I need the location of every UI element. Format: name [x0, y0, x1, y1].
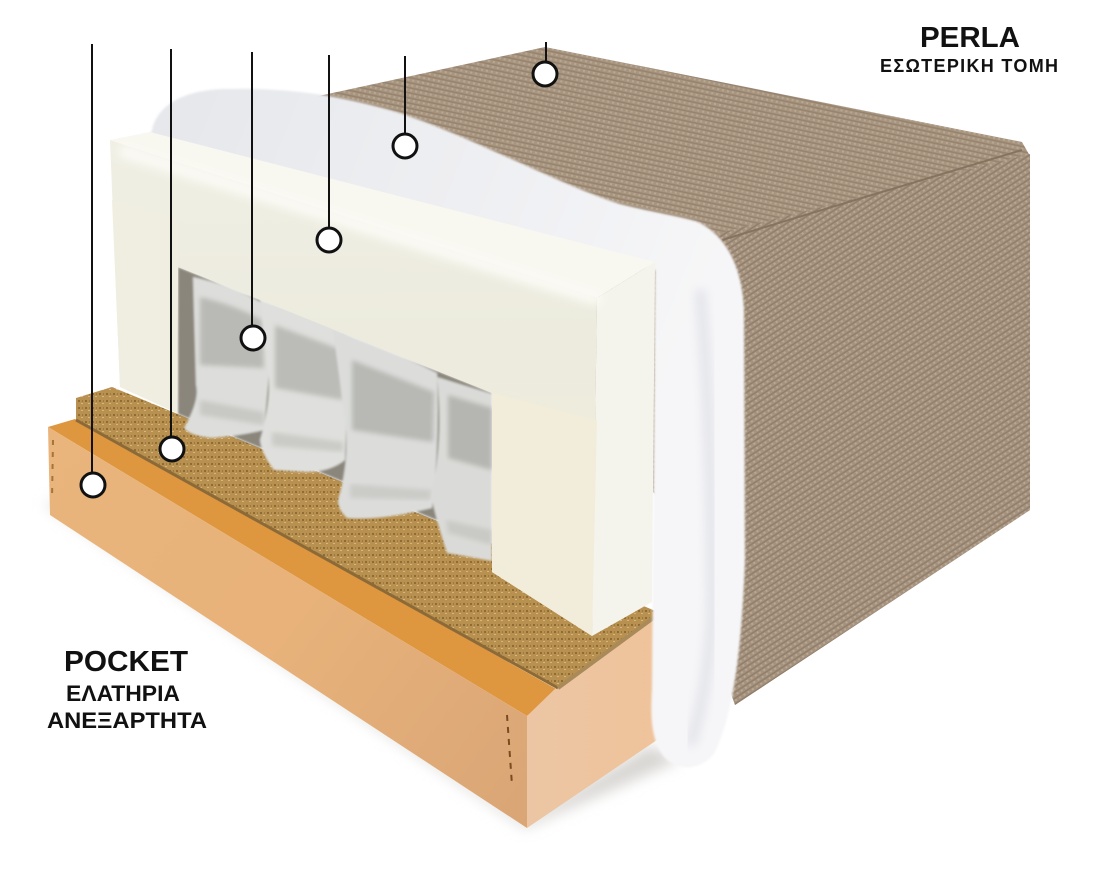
title: PERLA: ΕΣΩΤΕΡΙΚΗ ΤΟΜΗ: [880, 56, 1058, 76]
chipboard layer: [76, 387, 658, 688]
ground shadow: [46, 500, 680, 828]
title: PERLA: PERLA: [920, 22, 1020, 54]
marker 4: foam: [317, 55, 341, 252]
label: POCKET: POCKET: [64, 646, 188, 678]
marker 1: frame: [81, 44, 105, 497]
marker 2: chipboard: [160, 49, 184, 461]
leader lines and markers: [81, 42, 557, 497]
pocket 2: [260, 300, 346, 472]
marker 3: springs: [241, 52, 265, 350]
foam block: [110, 132, 655, 636]
pocket 1: [184, 277, 269, 438]
fabric cover: [300, 47, 1030, 705]
pocket springs: [178, 267, 492, 561]
label: POCKET: ΕΛΑΤΗΡΙΑ: [66, 681, 180, 706]
wooden frame: [48, 419, 660, 828]
pocket 3: [333, 330, 438, 518]
spring cavity: [178, 267, 492, 543]
batting layer: [150, 89, 745, 767]
title: PERLA: [880, 22, 1058, 76]
marker 5: batting: [393, 56, 417, 158]
marker 6: fabric: [533, 42, 557, 86]
label: POCKET: ΑΝΕΞΑΡΤΗΤΑ: [47, 708, 207, 733]
label: POCKET: [47, 646, 207, 733]
pocket 4: [431, 377, 492, 561]
